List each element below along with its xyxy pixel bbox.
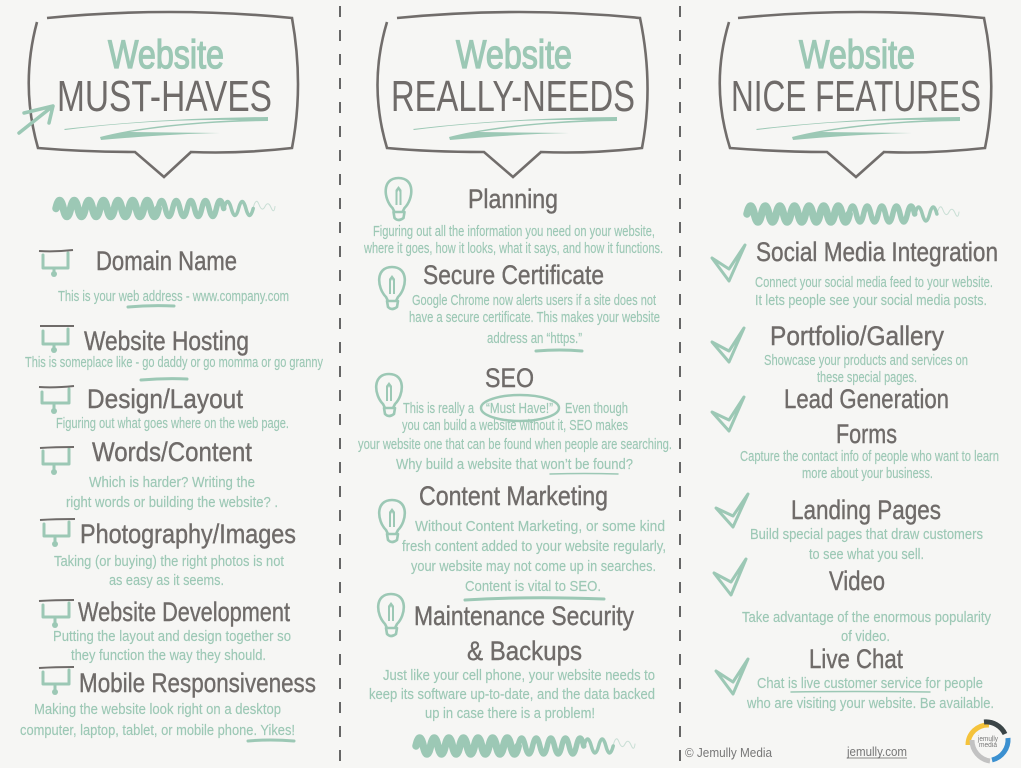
item: mobile responsiveness: Mobile Responsiveness — [79, 668, 316, 698]
item: secure certificate: Google Chrome now alerts users if a site does not — [412, 292, 657, 309]
title: really-needs: REALLY-NEEDS — [391, 72, 635, 121]
item: website hosting: Website Hosting — [84, 326, 249, 356]
item: seo: SEO — [485, 363, 534, 393]
item: website development: they function the way they should. — [71, 647, 266, 664]
circled emphasis — [481, 395, 559, 421]
item: words content: Words/Content — [92, 437, 252, 467]
item: secure certificate: Secure Certificate — [423, 260, 604, 290]
icon: check mark — [716, 659, 748, 694]
item: words content — [40, 437, 278, 511]
brush underline — [413, 117, 617, 140]
icon: check mark — [716, 494, 748, 527]
item: seo: Even though — [565, 400, 628, 417]
item: mobile responsiveness: Making the website look right on a desktop — [34, 701, 281, 718]
title: Website: Website — [799, 33, 915, 77]
item: planning: Planning — [468, 184, 558, 214]
item: photography: Taking (or buying) the right photos is not — [54, 553, 285, 570]
item: content marketing: Content Marketing — [419, 481, 608, 511]
icon: presentation board — [39, 250, 73, 277]
icon: light bulb — [379, 500, 405, 542]
item: live chat: Chat is live customer service for people — [757, 675, 983, 692]
icon: presentation board — [40, 519, 75, 547]
brush underline — [64, 117, 268, 140]
speech bubble — [378, 12, 648, 177]
icon: arrow — [19, 106, 53, 133]
panel: nice features — [712, 12, 999, 712]
item: maintenance: keep its software up-to-date, and the data backed — [369, 686, 655, 703]
item: portfolio: Portfolio/Gallery — [770, 321, 944, 351]
item: portfolio: these special pages. — [817, 369, 917, 386]
squiggle — [416, 738, 635, 754]
item: design layout: Design/Layout — [87, 384, 243, 414]
icon: light bulb — [378, 594, 404, 636]
panel: really-needs — [358, 12, 672, 754]
item: seo: you can build a website without it, SEO makes — [402, 417, 628, 434]
icon: presentation board — [39, 667, 74, 695]
icon: check mark — [712, 397, 744, 431]
logo: jemully media — [968, 722, 1008, 761]
item: words content: Which is harder? Writing the — [89, 474, 255, 491]
title: Website: Website — [456, 33, 572, 77]
item: maintenance — [369, 594, 655, 722]
item: live chat — [716, 644, 994, 712]
title: must-haves: MUST-HAVES — [57, 72, 272, 121]
icon: light bulb — [386, 178, 411, 220]
item: photography: as easy as it seems. — [109, 572, 224, 589]
item: website development — [39, 597, 291, 664]
icon: light bulb — [376, 374, 402, 416]
item: secure certificate — [379, 260, 660, 351]
item: landing pages — [716, 494, 983, 563]
item: secure certificate: address an “https.” — [487, 330, 582, 347]
icon: presentation board — [39, 600, 74, 628]
item: social media — [712, 237, 998, 309]
item: design layout: Figuring out what goes where on the web page. — [56, 415, 289, 432]
speech bubble — [29, 12, 298, 177]
item: lead generation: Forms — [836, 419, 897, 449]
item: content marketing: Content is vital to SEO. — [465, 578, 601, 595]
item: words content: right words or building the website? . — [66, 494, 278, 511]
item: domain name: Domain Name — [96, 246, 237, 276]
item: landing pages: to see what you sell. — [809, 546, 924, 563]
item: mobile responsiveness — [20, 667, 316, 741]
item: seo — [358, 363, 672, 474]
item: content marketing: fresh content added to your website regularly, — [402, 538, 666, 555]
item: seo: your website one that can be found when people are searching. — [358, 436, 672, 453]
item: mobile responsiveness: computer, laptop, tablet, or mobile phone. Yikes! — [20, 722, 295, 739]
item: planning: Figuring out all the information you need on your website, — [373, 223, 655, 240]
item: domain name: This is your web address - www.company.com — [58, 288, 289, 305]
icon: presentation board — [40, 447, 74, 475]
item: maintenance: & Backups — [467, 636, 582, 666]
item: planning — [363, 178, 663, 257]
item: website hosting: This is someplace like - go daddy or go momma or go granny — [25, 354, 323, 371]
icon: light bulb — [379, 267, 405, 309]
item: video — [714, 559, 991, 645]
footer: copyright: © Jemully Media — [685, 745, 773, 760]
item: lead generation: Lead Generation — [784, 384, 949, 414]
speech bubble — [720, 12, 991, 177]
title: Website: Website — [108, 33, 224, 77]
icon: check mark — [712, 245, 745, 281]
item: photography: Photography/Images — [80, 519, 296, 549]
item: lead generation — [712, 384, 999, 482]
item: content marketing — [379, 481, 666, 600]
icon: check mark — [714, 559, 746, 595]
panel: must-haves — [19, 12, 323, 741]
squiggle — [56, 200, 275, 216]
item: landing pages: Build special pages that draw customers — [750, 526, 983, 543]
item: video: Video — [829, 566, 885, 596]
squiggle — [747, 206, 959, 222]
icon: presentation board — [40, 326, 74, 353]
footer: website link: jemully.com — [846, 744, 907, 759]
item: planning: where it goes, how it looks, what it says, and how it functions. — [363, 240, 663, 257]
item: domain name — [39, 246, 289, 307]
logo: jemully media: jemully — [977, 736, 998, 743]
item: seo: Why build a website that won’t be found? — [396, 456, 633, 473]
item: lead generation: more about your business. — [802, 465, 933, 482]
item: content marketing: Without Content Marketing, or some kind — [415, 518, 665, 535]
item: seo: “Must Have!” — [486, 400, 553, 417]
item: website development: Website Development — [78, 597, 290, 627]
item: maintenance: up in case there is a problem! — [425, 705, 595, 722]
item: video: of video. — [841, 628, 890, 645]
item: seo: This is really a — [403, 400, 474, 417]
brush underline — [756, 117, 960, 140]
icon: presentation board — [39, 386, 74, 414]
item: website hosting — [25, 326, 323, 380]
item: website development: Putting the layout and design together so — [53, 628, 291, 645]
item: content marketing: your website may not come up in searches. — [411, 558, 656, 575]
item: maintenance: Just like your cell phone, your website needs to — [383, 667, 655, 684]
item: design layout — [39, 384, 289, 432]
item: secure certificate: have a secure certificate. This makes your website — [409, 309, 660, 326]
item: live chat: Live Chat — [809, 644, 903, 674]
item: portfolio — [712, 321, 968, 386]
icon: check mark — [712, 328, 744, 362]
item: photography — [40, 519, 296, 589]
item: maintenance: Maintenance Security — [414, 601, 634, 631]
item: landing pages: Landing Pages — [791, 495, 941, 525]
logo: jemully media: media — [979, 742, 997, 749]
